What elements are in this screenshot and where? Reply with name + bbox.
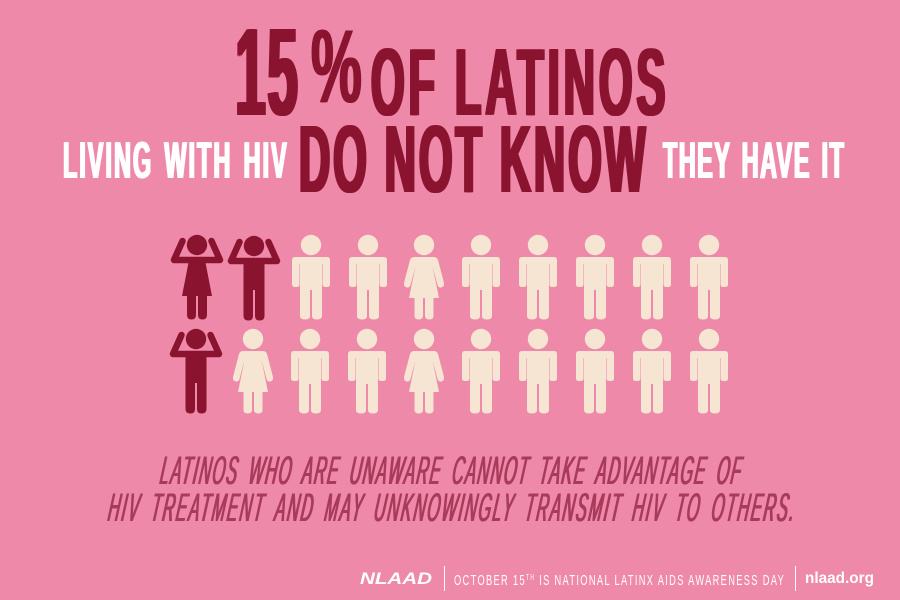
footer awareness day text: OCTOBER 15 [454, 572, 525, 589]
footer [360, 566, 874, 591]
heading: they have it: THEY HAVE IT [663, 130, 844, 190]
title [63, 4, 844, 213]
footer divider left [444, 566, 445, 591]
heading: percent sign: % [311, 8, 362, 124]
body text [106, 448, 798, 530]
heading: of Latinos: OF LATINOS [371, 29, 665, 136]
body line 2: HIV TREATMENT AND MAY UNKNOWINGLY TRANSMIT HIV TO OTHERS. [106, 485, 798, 530]
footer awareness day text: IS NATIONAL LATINX AIDS AWARENESS DAY [535, 572, 784, 589]
footer divider right [795, 566, 796, 591]
footer website: nlaad.org [805, 570, 874, 587]
heading: 15: 15 [235, 4, 297, 142]
body line 1: LATINOS WHO ARE UNAWARE CANNOT TAKE ADVANTAGE OF [158, 448, 746, 493]
logo: NLAAD: NLAAD [360, 569, 432, 588]
heading: living with HIV: LIVING WITH HIV [63, 130, 287, 190]
heading: do not know: DO NOT KNOW [299, 106, 646, 213]
pictogram: 3 of 20 people [173, 235, 728, 414]
row 1 of people [174, 235, 728, 320]
row 2 of people [173, 329, 728, 414]
footer awareness day text: TH [526, 574, 534, 582]
